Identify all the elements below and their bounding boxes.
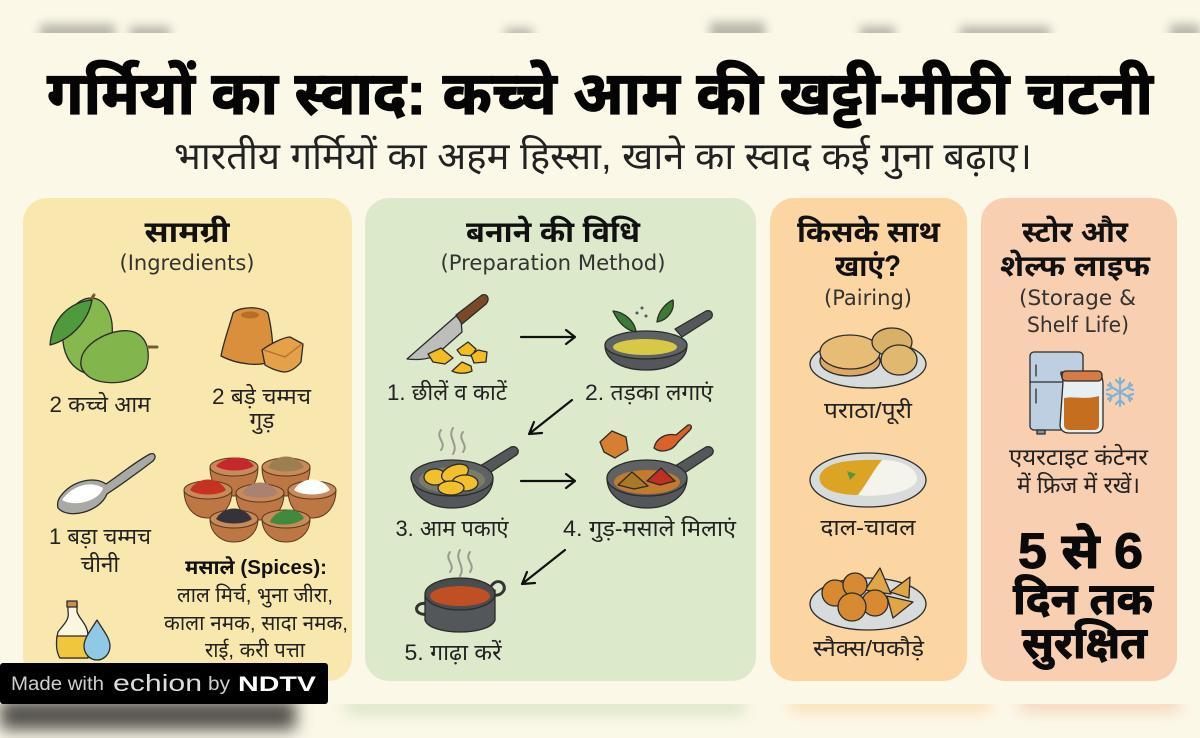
badge: made with echion by NDTV — [0, 663, 328, 704]
label: sugar — [49, 524, 152, 577]
icon: snacks plate — [810, 568, 926, 630]
icon: pot — [417, 550, 504, 632]
label: mangoes: 2 कच्चे आम — [50, 391, 151, 417]
heading: storage: शेल्फ लाइफ — [1000, 249, 1151, 283]
blurred bottom strip — [0, 695, 1180, 730]
label: step 2: 2. तड़का लगाएं — [585, 380, 714, 405]
heading: method: बनाने की विधि — [466, 215, 641, 249]
callout: five to six days: 5 से 6 — [1018, 523, 1143, 579]
icon: sugar spoon — [58, 454, 155, 514]
storage text — [1009, 444, 1149, 498]
label: step 5: 5. गाढ़ा करें — [404, 639, 502, 665]
subtitle: भारतीय गर्मियों का अहम हिस्सा, खाने का स्वाद कई गुना बढ़ाए। — [174, 134, 1032, 179]
icon: knife and mango cubes — [407, 295, 488, 373]
panel: pairing — [770, 198, 967, 681]
arrow: step 1 to 2 — [521, 330, 575, 344]
callout: five to six days: सुरक्षित — [1022, 618, 1148, 670]
heading: storage: Shelf Life) — [1027, 313, 1129, 337]
label: step 4: 4. गुड़-मसाले मिलाएं — [563, 515, 737, 543]
icon: adding spices pan — [600, 425, 713, 508]
label: dal rice: दाल-चावल — [820, 515, 916, 540]
label: sugar: चीनी — [81, 552, 120, 577]
icon: snowflake — [1107, 378, 1133, 406]
storage text: में फ्रिज में रखें। — [1017, 472, 1140, 498]
heading: pairing: (Pairing) — [824, 286, 912, 310]
heading: pairing: खाएं? — [835, 250, 901, 283]
panel: method — [365, 198, 756, 681]
arrow: step 2 to 3 — [529, 400, 572, 434]
heading: method — [440, 215, 666, 275]
label: sugar: 1 बड़ा चम्मच — [49, 524, 152, 549]
heading: ingredients: सामग्री — [144, 216, 231, 249]
heading: pairing: किसके साथ — [797, 215, 941, 249]
label: paratha: पराठा/पूरी — [824, 398, 913, 425]
icon: jaggery — [221, 308, 303, 372]
callout: five to six days: दिन तक — [1013, 574, 1154, 624]
spices text: राई, करी पत्ता — [205, 638, 306, 662]
heading: ingredients: (Ingredients) — [120, 251, 254, 275]
heading: storage: स्टोर और — [1022, 216, 1129, 249]
badge: made with echion by NDTV: NDTV — [238, 673, 316, 696]
storage text: एयरटाइट कंटेनर — [1009, 444, 1149, 470]
arrow: step 3 to 4 — [521, 474, 575, 488]
spices text: लाल मिर्च, भुना जीरा, — [177, 583, 333, 608]
heading: method: (Preparation Method) — [440, 251, 666, 275]
spices text — [164, 555, 348, 662]
icon: tempering pan — [605, 300, 712, 370]
heading: storage — [1000, 216, 1151, 337]
icon: fridge with jar — [1030, 352, 1103, 434]
heading: storage: (Storage & — [1019, 286, 1136, 310]
title: गर्मियों का स्वाद: कच्चे आम की खट्टी-मीठी चटनी — [47, 60, 1154, 128]
label: step 1: 1. छीलें व काटें — [387, 379, 508, 405]
blurred top strip — [40, 22, 1200, 44]
label: snacks: स्नैक्स/पकौड़े — [813, 635, 925, 661]
icon: cooking mangoes pan — [411, 428, 518, 508]
label: jaggery — [212, 383, 312, 435]
icon: paratha and puri plate — [810, 328, 926, 388]
icon: oil and water — [56, 601, 110, 660]
icon: spice bowls — [184, 456, 336, 542]
heading: ingredients — [120, 216, 254, 275]
heading: pairing — [797, 215, 941, 310]
label: step 3: 3. आम पकाएं — [396, 516, 509, 541]
panel: storage — [981, 198, 1177, 681]
spices text: काला नमक, सादा नमक, — [164, 612, 348, 635]
badge: made with echion by NDTV: echion — [113, 670, 202, 696]
callout: five to six days — [1013, 523, 1154, 670]
icon: dal rice plate — [810, 453, 926, 507]
icon: raw mangoes — [50, 295, 157, 383]
badge: made with echion by NDTV: by — [208, 674, 231, 695]
badge: made with echion by NDTV: Made with — [11, 674, 104, 695]
arrow: step 4 to 5 — [522, 550, 565, 584]
label: jaggery: गुड़ — [250, 408, 275, 435]
label: jaggery: 2 बड़े चम्मच — [212, 383, 312, 409]
spices text: मसाले (Spices): — [185, 555, 327, 579]
panel: ingredients — [23, 198, 352, 681]
